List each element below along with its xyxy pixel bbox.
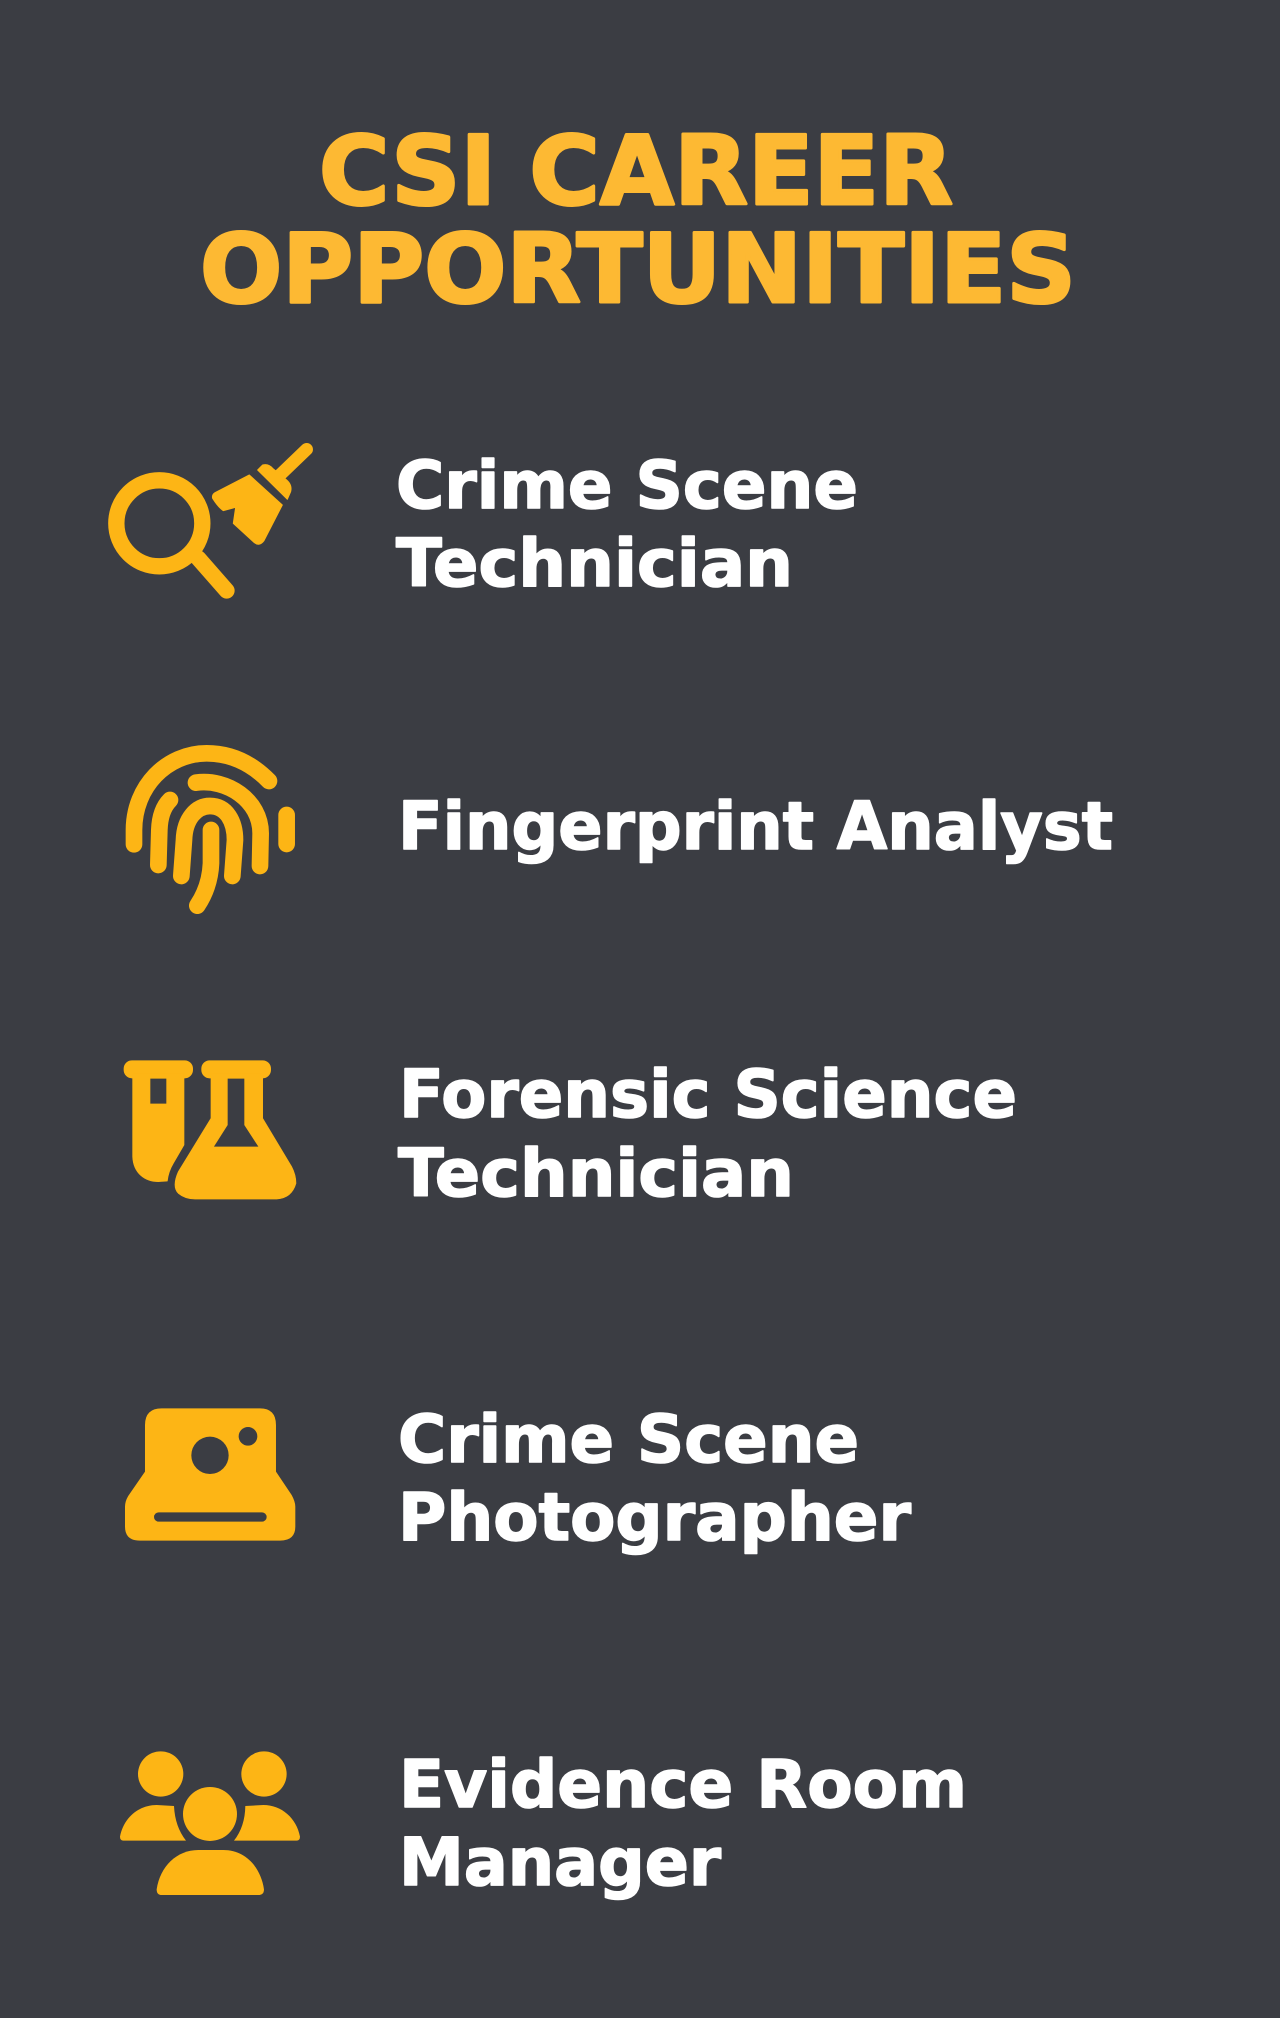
job title: forensic science technician [398,1056,1017,1212]
icon: fingerprint [134,753,287,906]
row: fingerprint analyst [134,753,1113,906]
icon: group of people [120,1751,300,1895]
row: crime scene technician [116,447,858,602]
title: CSI CAREER [319,117,953,227]
job title: fingerprint analyst: Fingerprint Analyst [398,788,1113,865]
job title: crime scene technician: Crime Scene [396,447,858,524]
job title: evidence room manager: Manager [399,1824,721,1901]
job title: crime scene photographer: Photographer [398,1479,911,1556]
job title: evidence room manager [399,1746,967,1901]
job title: crime scene technician: Technician [396,525,793,602]
job title: evidence room manager: Evidence Room [399,1746,967,1823]
job title: forensic science technician: Forensic Science [399,1056,1017,1133]
icon: test tube and flask [124,1061,296,1199]
row: forensic science technician [124,1056,1017,1212]
row: crime scene photographer [125,1401,911,1556]
job title: crime scene photographer: Crime Scene [398,1401,859,1478]
icon: instant camera [125,1408,295,1541]
job title: crime scene technician [396,447,858,602]
icon: magnifier and brush [116,449,307,591]
row: evidence room manager [120,1746,967,1901]
job title: forensic science technician: Technician [398,1135,794,1212]
job title: crime scene photographer [398,1401,911,1556]
title: OPPORTUNITIES [200,215,1076,325]
title [200,117,1076,325]
